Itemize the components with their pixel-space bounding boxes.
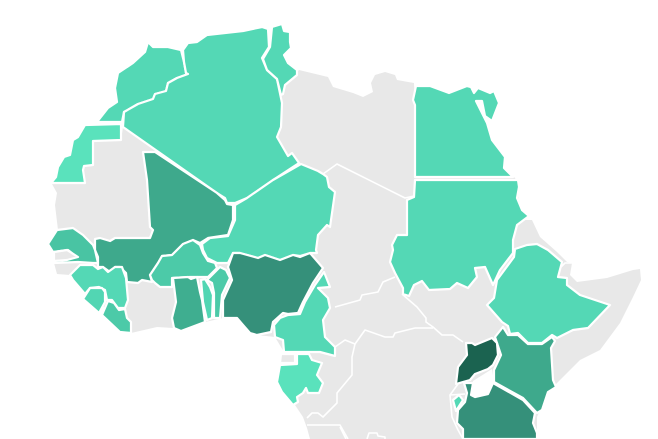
country: Mali: [95, 152, 233, 283]
country: Guinea: [70, 265, 128, 308]
country: Uganda: [456, 338, 498, 384]
country: Cameroon: [274, 272, 335, 356]
country: Senegal: [48, 228, 98, 263]
country: Togo: [201, 279, 213, 320]
country: Niger: [202, 164, 335, 263]
country: Tanzania: [457, 383, 537, 439]
country: Kenya: [494, 327, 556, 413]
country: Ghana: [172, 277, 205, 331]
country: Algeria: [123, 27, 299, 203]
country: Burundi: [453, 395, 463, 411]
country: Nigeria: [223, 253, 323, 335]
country: Benin: [207, 267, 230, 318]
country: Morocco: [85, 42, 188, 123]
Lake Victoria: [471, 369, 494, 397]
country: Gabon: [277, 354, 323, 405]
country: Burkina Faso: [150, 240, 217, 287]
country: Egypt: [413, 86, 513, 177]
country: Liberia: [102, 301, 131, 333]
country: Western Sahara: [51, 124, 121, 183]
country: Gambia: [54, 250, 78, 261]
country: Sierra Leone: [83, 288, 105, 313]
country: Tunisia: [263, 24, 297, 95]
country: Equatorial Guinea: [280, 354, 295, 363]
country: Ethiopia: [487, 244, 610, 343]
borders between no-data countries: [131, 164, 572, 439]
landmass: countries without data: [52, 70, 641, 439]
country: Sudan: [390, 180, 529, 296]
